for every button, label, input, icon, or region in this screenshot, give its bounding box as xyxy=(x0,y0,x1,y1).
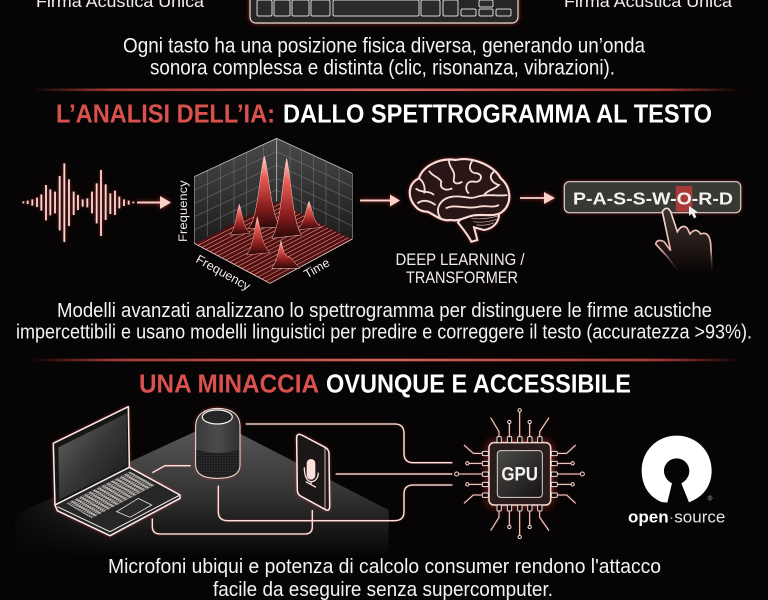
text: key explanation xyxy=(123,34,645,80)
text: conclusion xyxy=(108,555,661,600)
axis label: floor frequency: Frequency xyxy=(194,252,254,294)
label: deep learning: DEEP LEARNING / xyxy=(396,251,525,269)
text: key explanation: Ogni tasto ha una posizione fisica diversa, generando un’onda xyxy=(123,34,645,58)
text: key explanation: sonora complessa e distinta (clic, risonanza, vibrazioni). xyxy=(150,56,615,80)
icon: GPU chip: ® xyxy=(708,495,713,503)
desk surface xyxy=(15,420,389,562)
password text: P-A-S-S-W-O-R-D xyxy=(573,188,733,208)
label: deep learning: TRANSFORMER xyxy=(406,269,518,287)
icon: pointing hand xyxy=(656,208,712,275)
text: model explanation: Modelli avanzati analizzano lo spettrogramma per distinguere le firme acustiche xyxy=(57,300,712,322)
password field with hand xyxy=(564,182,741,275)
connector to open source xyxy=(591,472,633,476)
icon: GPU chip: GPU xyxy=(501,464,538,485)
axis label: time: Time xyxy=(301,255,332,281)
heading: ubiquitous threat xyxy=(139,370,631,398)
icon: cursor xyxy=(689,206,698,218)
heading: ubiquitous threat: OVUNQUE E ACCESSIBILE xyxy=(326,370,631,398)
chart: 3D spectrogram xyxy=(176,138,352,294)
heading: AI analysis xyxy=(56,100,712,128)
heading: AI analysis: DALLO SPETTROGRAMMA AL TESTO xyxy=(283,100,712,128)
text: conclusion: Microfoni ubiqui e potenza di calcolo consumer rendono l'attacco xyxy=(108,555,661,578)
icon: open source logo xyxy=(642,436,712,503)
text: open source: open·source xyxy=(628,507,725,526)
arrow: chart to brain xyxy=(360,194,400,206)
icon: keyboard xyxy=(250,0,518,23)
arrow: waveform to chart xyxy=(137,196,171,209)
arrow: brain to password xyxy=(520,192,555,204)
icon: laptop xyxy=(53,407,180,536)
icon: GPU chip xyxy=(455,409,725,539)
label: deep learning xyxy=(396,251,525,287)
icon: smartphone with microphone xyxy=(297,434,330,510)
icon: smart speaker xyxy=(196,408,240,478)
heading: ubiquitous threat: UNA MINACCIA xyxy=(139,370,319,398)
connection wires xyxy=(152,424,452,534)
icon: sound waveform xyxy=(23,163,133,242)
axis label: vertical frequency: Frequency xyxy=(176,179,190,242)
heading: AI analysis: L’ANALISI DELL’IA: xyxy=(56,100,275,128)
text: model explanation xyxy=(16,300,752,344)
threat diagram xyxy=(15,407,725,562)
icon: brain xyxy=(410,159,509,242)
